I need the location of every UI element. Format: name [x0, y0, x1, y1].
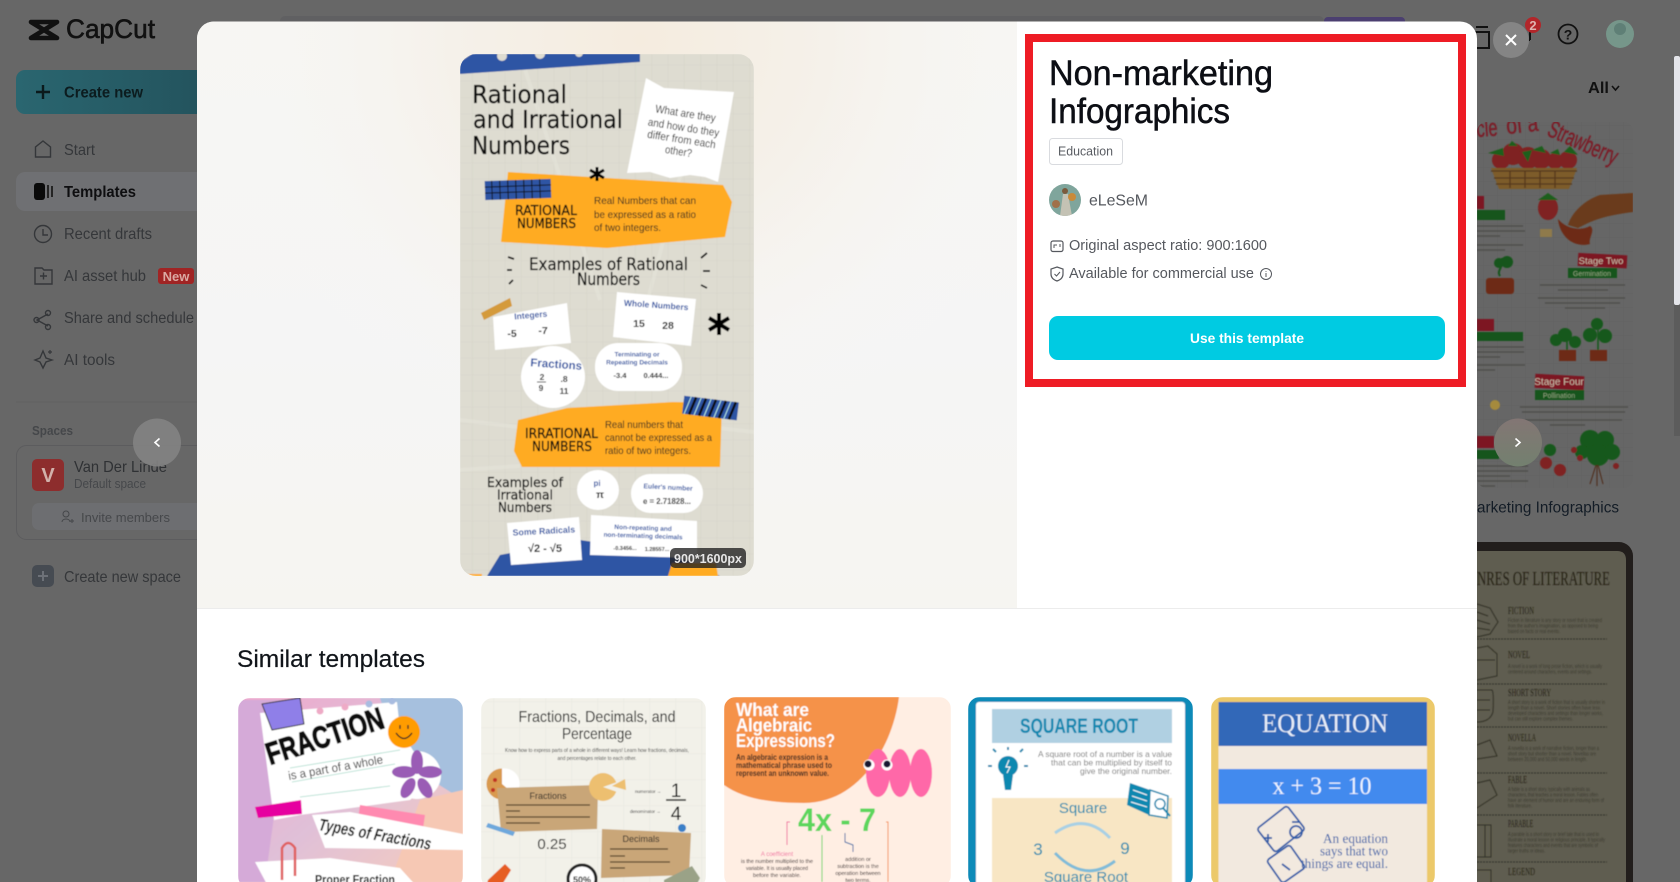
- strawberry plant: [1540, 430, 1620, 486]
- equation band: [1218, 769, 1427, 804]
- question note: and how do they: [647, 116, 720, 140]
- stage text lines: [1538, 285, 1625, 308]
- annotation: coefficient: [741, 852, 813, 879]
- top right toolbar: All: [1588, 80, 1609, 97]
- header: [1218, 702, 1427, 746]
- examples of rational numbers heading: Examples of Rational: [529, 255, 688, 275]
- card title: NRES OF LITERATURE: [1477, 568, 1610, 590]
- poster title: and Irrational: [473, 105, 623, 134]
- CapCut logo: CapCut: [66, 14, 155, 44]
- top right toolbar: ?: [1564, 26, 1572, 42]
- small asterisk: [590, 167, 604, 181]
- definition: [736, 753, 832, 778]
- nav: templates selected: [16, 172, 216, 211]
- pink mascot: [864, 749, 932, 797]
- lower strip: [255, 858, 420, 882]
- pi blob: π: [596, 489, 604, 501]
- stage four label: Stage Four: [1534, 377, 1584, 388]
- card title: Strawberry: [1544, 116, 1622, 171]
- author: [1049, 184, 1148, 216]
- non-repeating decimals card: [590, 515, 697, 558]
- card title: of a: [1505, 110, 1540, 140]
- genre rows: based on facts or real events.: [1508, 629, 1560, 635]
- examples of rational numbers heading: [507, 253, 710, 290]
- stage four label: [1520, 374, 1628, 425]
- bottom blue shape: [468, 540, 720, 576]
- use this template button: [1049, 316, 1445, 360]
- space card: Invite members: [81, 510, 170, 525]
- genre rows: FABLE: [1508, 774, 1527, 786]
- nav: start: [36, 141, 96, 159]
- irrational numbers banner: cannot be expressed as a: [605, 432, 712, 444]
- book icon: [1127, 783, 1170, 818]
- genre rows: A short story is a work of fiction that is usually shorter in: [1508, 700, 1605, 706]
- red highlight frame: [1029, 38, 1462, 383]
- title: Percentage: [562, 726, 632, 743]
- template card: algebraic expressions: [724, 697, 951, 882]
- pizza: [486, 768, 520, 800]
- annotation: operation: [835, 857, 881, 882]
- examples of irrational numbers heading: [488, 476, 564, 513]
- examples of irrational numbers heading: Examples of: [487, 475, 564, 491]
- header: SQUARE ROOT: [1020, 715, 1138, 738]
- title: Fractions, Decimals, and: [518, 709, 676, 726]
- blue tape: [486, 823, 515, 836]
- create new button: Create new: [64, 84, 144, 102]
- genre rows: A parable is a short story or brief tale that is used to: [1508, 832, 1599, 838]
- examples of irrational numbers heading: Irrational: [497, 488, 553, 504]
- annotation: coefficient: variable. It is usually placed: [746, 866, 808, 872]
- template card: fraction: Types of Fractions: [317, 815, 433, 854]
- template title: Non-marketing: [1049, 54, 1273, 93]
- nav: AI tools: AI tools: [64, 352, 115, 369]
- non-repeating decimals card: Non-repeating and: [614, 524, 672, 533]
- create new space: [32, 565, 181, 587]
- rational numbers banner: [485, 172, 732, 248]
- subtitle: is a part of a whole: [287, 752, 384, 783]
- intro: Know how to express parts of a whole in different ways! Learn how fractions, decimals,: [505, 748, 689, 754]
- terminating decimals blob: 0.444...: [643, 371, 669, 380]
- one quarter: denominator →: [630, 809, 661, 814]
- decimals note: Decimals: [622, 834, 660, 844]
- integers card: -5: [507, 328, 517, 340]
- genre rows: PARABLE: [1508, 818, 1533, 830]
- basket of strawberries: [1488, 141, 1578, 189]
- genre rows: NOVEL: [1508, 649, 1530, 661]
- size badge: 900*1600px: [674, 551, 743, 566]
- poster title: [473, 83, 622, 155]
- row illustrations: [1477, 604, 1498, 882]
- question note: [627, 78, 734, 182]
- some radicals card: [507, 517, 582, 565]
- definition: represent an unknown value.: [736, 769, 829, 778]
- annotation: coefficient: A coefficient: [761, 852, 793, 858]
- terminating decimals blob: -3.4: [614, 371, 627, 380]
- non-repeating decimals card: -0.3456...: [613, 546, 637, 552]
- nav: AI asset hub: [35, 268, 194, 285]
- background card: strawberry life cycle: [1476, 110, 1633, 488]
- expression: 4x - 7: [798, 802, 876, 838]
- create new button: [16, 70, 216, 114]
- genre rows: LEGEND: [1508, 866, 1535, 878]
- one quarter: [630, 781, 686, 825]
- equation band: x + 3 = 10: [1272, 773, 1372, 800]
- binder clip: [262, 698, 304, 730]
- space card: Default space: [74, 476, 146, 491]
- euler's number blob: e = 2.71828...: [643, 497, 691, 506]
- genre rows: [1508, 605, 1605, 878]
- heading: Expressions?: [736, 731, 835, 751]
- author: eLeSeM: [1089, 192, 1148, 210]
- hero background: [197, 21, 1017, 608]
- tapes: [255, 800, 302, 818]
- category tag: Education: [1058, 144, 1113, 158]
- percent donut: [568, 865, 596, 882]
- euler's number blob: [631, 474, 703, 513]
- numbers and arcs: [1033, 824, 1130, 871]
- size badge: [670, 548, 746, 568]
- equation explanation: things are equal.: [1301, 857, 1388, 872]
- nav: templates selected: Templates: [64, 184, 136, 201]
- numbers and arcs: 3: [1033, 840, 1043, 859]
- fractions note: Fractions: [529, 791, 567, 801]
- nav: AI tools: [35, 350, 115, 369]
- card title: [1477, 122, 1620, 168]
- previous arrow button: [133, 418, 181, 466]
- scrollbar: [1674, 56, 1680, 436]
- genre rows: developed characters and settings than longer works,: [1508, 711, 1603, 717]
- aspect ratio line: Original aspect ratio: 900:1600: [1069, 238, 1267, 254]
- question note: What are they: [654, 103, 717, 125]
- paperclip: [282, 843, 295, 880]
- title: [518, 709, 676, 743]
- genre rows: have an element of humor and are an enduring form of: [1508, 798, 1604, 804]
- annotation: coefficient: before the variable.: [753, 873, 801, 879]
- euler's number blob: Euler's number: [643, 483, 693, 493]
- template card: equation: [1211, 697, 1435, 882]
- genre rows: features characters and events that are symbolic of: [1508, 843, 1598, 849]
- rational numbers banner: RATIONAL: [515, 204, 578, 219]
- puzzle icon: [1257, 805, 1305, 882]
- fractions circle: 11: [560, 386, 569, 396]
- category tag: [1050, 138, 1122, 164]
- definition: A square root of a number is a value: [1038, 749, 1172, 759]
- create new space: Create new space: [64, 569, 181, 586]
- commercial use line: Available for commercial use: [1069, 266, 1254, 282]
- whole numbers card: Whole Numbers: [624, 298, 689, 312]
- genre rows: A novella is a work of narrative fiction, longer than a: [1508, 746, 1600, 752]
- space card: Van Der Linde: [74, 459, 167, 476]
- top right toolbar: [1475, 17, 1634, 97]
- torn paper: [260, 702, 432, 820]
- nav: recent drafts: Recent drafts: [64, 226, 152, 243]
- poster title: Numbers: [472, 131, 570, 160]
- rational numbers banner: of two integers.: [594, 222, 661, 234]
- fraction title: FRACTION: [261, 701, 388, 772]
- non-repeating decimals card: non-terminating decimals: [603, 532, 683, 541]
- definition: mathematical phrase used to: [736, 761, 832, 770]
- annotation: operation: operation between: [835, 871, 881, 877]
- heading: What are: [736, 700, 809, 720]
- fractions circle: 9: [539, 383, 544, 393]
- equation explanation: An equation: [1323, 832, 1388, 847]
- card title: cle: [1476, 115, 1498, 143]
- whole numbers card: [613, 292, 696, 346]
- genre rows: from the author's imagination, as opposed to being: [1508, 624, 1598, 630]
- sidebar: [16, 14, 216, 587]
- genre rows: centered around characters, events and settings.: [1508, 670, 1592, 676]
- one quarter: numerator →: [635, 789, 661, 794]
- template title: [1049, 54, 1273, 131]
- use this template button: Use this template: [1190, 330, 1304, 346]
- examples of irrational numbers heading: Numbers: [498, 500, 552, 516]
- numbers and arcs: 9: [1120, 839, 1130, 858]
- irrational numbers banner: ratio of two integers.: [605, 445, 691, 457]
- template card: square root: [968, 697, 1193, 882]
- definition: that can be multiplied by itself to: [1051, 758, 1172, 768]
- intro: and percentages relate to each other.: [558, 756, 637, 762]
- genre rows: A novel is a work of long prose fiction, which is usually: [1508, 664, 1602, 670]
- template preview poster: [460, 49, 754, 576]
- top blue tape: [460, 54, 640, 74]
- similar templates heading: Similar templates: [237, 646, 425, 673]
- integers card: Integers: [514, 309, 548, 321]
- examples of rational numbers heading: Numbers: [577, 270, 640, 290]
- plants: [1550, 318, 1612, 361]
- annotation: operation: addition or: [845, 857, 871, 863]
- spaces heading: Spaces: [32, 423, 73, 438]
- genre rows: length than a novel. Short stories often have less: [1508, 706, 1600, 712]
- some radicals card: √2 - √5: [528, 543, 562, 555]
- detail panel highlighted in red: [1029, 38, 1462, 383]
- nav: AI asset hub: AI asset hub: [64, 268, 146, 285]
- flower sticker: [392, 750, 442, 801]
- non-repeating decimals card: 1.28557...: [645, 547, 670, 553]
- genre rows: short story but shorter than a novel. Novellas are: [1508, 752, 1596, 758]
- modal: [197, 21, 1477, 882]
- terminating decimals blob: Repeating Decimals: [606, 360, 668, 366]
- template card: fraction: [238, 698, 463, 882]
- genre rows: A fable is a short story, typically with animals as: [1508, 787, 1590, 793]
- irrational numbers banner: Real numbers that: [605, 419, 683, 431]
- background card: genres of literature: [1440, 542, 1633, 882]
- question note: differ from each: [646, 129, 716, 151]
- next arrow button: [1494, 418, 1542, 466]
- template title: Infographics: [1049, 92, 1230, 131]
- definition: [1038, 749, 1172, 776]
- space card: V: [41, 465, 55, 487]
- rational numbers banner: be expressed as a ratio: [594, 209, 696, 221]
- row dividers: [1477, 639, 1607, 862]
- space card: [16, 446, 216, 540]
- genre rows: Fiction in literature is any story or novel that is created: [1508, 618, 1602, 624]
- irrational numbers banner: IRRATIONAL: [525, 427, 599, 442]
- annotation: operation: subtraction is the: [837, 864, 879, 870]
- nav: recent drafts: [34, 226, 152, 243]
- fractions circle: [521, 346, 585, 408]
- poster title: Rational: [472, 80, 567, 109]
- hand with strawberry seed: [1538, 193, 1633, 245]
- intro: [505, 748, 689, 762]
- genre rows: FICTION: [1508, 605, 1534, 617]
- genre rows: illustrate a moral lesson or religious principle. It typically: [1508, 838, 1605, 844]
- genre rows: between 20,000 and 50,000 words in length.: [1508, 757, 1587, 763]
- one quarter: 4: [671, 804, 682, 825]
- equation explanation: says that two: [1320, 844, 1388, 860]
- genre rows: folk literature.: [1508, 804, 1532, 810]
- heading: Algebraic: [736, 716, 812, 736]
- peach panel: [992, 798, 1172, 882]
- sale tag: [486, 864, 511, 882]
- genre rows: SHORT STORY: [1508, 687, 1551, 699]
- whole numbers card: 15: [633, 318, 645, 330]
- nav: share and schedule: Share and schedule: [64, 310, 194, 327]
- header: EQUATION: [1262, 709, 1388, 738]
- stage four label: Pollination: [1543, 393, 1575, 400]
- irrational numbers banner: NUMBERS: [532, 440, 592, 455]
- header: [992, 709, 1172, 743]
- fractions circle: .8: [560, 374, 568, 384]
- heading: [736, 700, 835, 751]
- genre rows: NOVELLA: [1508, 732, 1536, 744]
- definition: give the original number.: [1080, 766, 1172, 776]
- template card: fractions decimals percentage: [481, 698, 706, 882]
- fractions circle: 2: [540, 372, 545, 382]
- poster paper: [460, 54, 754, 576]
- equation explanation: [1301, 832, 1388, 872]
- integers card: [481, 298, 571, 350]
- nav: AI asset hub: New: [163, 269, 190, 284]
- stage two label: Germination: [1573, 271, 1611, 278]
- some radicals card: Some Radicals: [512, 524, 575, 538]
- annotation arrows: [787, 822, 790, 845]
- whole numbers card: 28: [662, 320, 674, 332]
- decimal value: 0.25: [537, 836, 567, 853]
- terminating decimals blob: Terminating or: [614, 352, 660, 358]
- rational numbers banner: NUMBERS: [517, 217, 576, 232]
- nav: start: Start: [64, 142, 96, 159]
- annotation: coefficient: is the number multiplied to the: [741, 859, 813, 865]
- big asterisk: [709, 313, 729, 335]
- light bulb icon: [988, 747, 1028, 790]
- pie: [589, 773, 626, 801]
- rational numbers banner: Real Numbers that can: [594, 195, 696, 207]
- fractions note: [497, 785, 598, 832]
- background card caption: arketing Infographics: [1477, 500, 1619, 516]
- pi blob: pi: [593, 479, 601, 488]
- pi blob: [577, 470, 619, 510]
- close button: [1493, 22, 1529, 58]
- genre rows: characters, that teaches a moral lesson. Fables often: [1508, 792, 1598, 798]
- square label: Square: [1059, 800, 1107, 817]
- money: [664, 866, 700, 882]
- terminating decimals blob: [595, 343, 682, 391]
- decimals note: [601, 824, 691, 878]
- stage two label: [1568, 253, 1627, 278]
- fractions circle: Fractions: [530, 357, 582, 373]
- one quarter: 1: [671, 781, 681, 802]
- top right toolbar: 2: [1529, 18, 1537, 33]
- left stage fragments: [1477, 196, 1528, 486]
- torn strip: [312, 812, 463, 850]
- stage two label: Stage Two: [1579, 256, 1623, 267]
- nav: share and schedule: [34, 310, 194, 330]
- question note: other?: [664, 144, 693, 160]
- definition: An algebraic expression is a: [736, 753, 828, 762]
- irrational numbers banner: [514, 396, 739, 467]
- genre rows: larger truths or ideas.: [1508, 848, 1545, 854]
- genre rows: but can still explore complex themes.: [1508, 716, 1573, 722]
- smiley sticker: [388, 716, 420, 748]
- integers card: -7: [538, 325, 548, 337]
